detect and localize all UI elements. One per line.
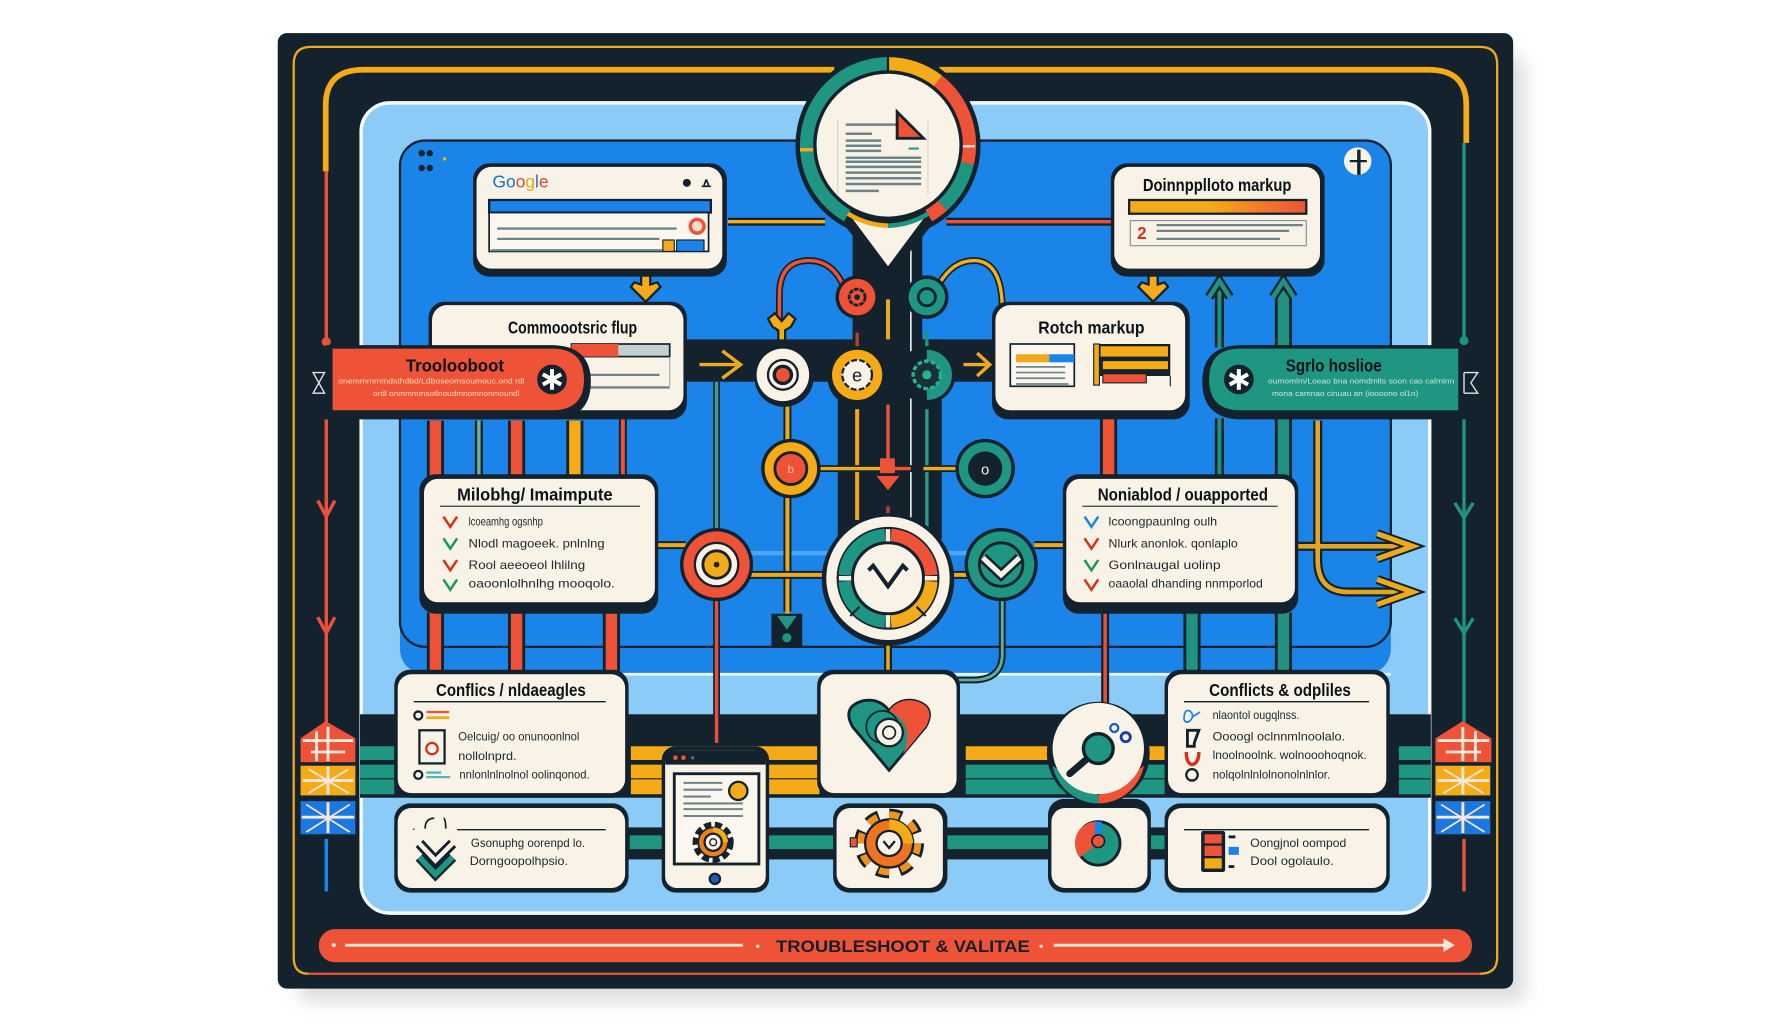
- star badge left: [537, 365, 567, 394]
- duplicate markup title: Doinnpplloto markup: [1143, 175, 1292, 195]
- arrow heads: teal up: [1209, 281, 1294, 297]
- conflicts card left: [394, 670, 629, 798]
- dark connector bands: [360, 229, 1431, 859]
- conflicts right title: Conflicts & odpliles: [1209, 680, 1351, 700]
- star badge right: [1224, 365, 1254, 394]
- not supported card: Gonlnaugal uolinp: [1109, 558, 1221, 572]
- teal structured pill: [1202, 345, 1463, 419]
- node: teal o: [955, 439, 1015, 498]
- missing card: oaoonlolhnlhg mooqolo.: [469, 576, 615, 590]
- footer banner: [319, 929, 1472, 962]
- red troubleshoot pill: [326, 345, 591, 419]
- missing card: lcoeamhg ogsnhp: [469, 515, 543, 529]
- red pill title: Troolooboot: [406, 355, 504, 375]
- conflicts card right: lnoolnoolnk. wolnooohoqnok.: [1213, 748, 1367, 762]
- heart icon: [849, 700, 930, 770]
- gear card: [833, 803, 947, 893]
- node: target: [754, 347, 814, 407]
- stack card right: [1165, 803, 1390, 893]
- horizontal stripes: [360, 746, 1431, 849]
- node: teal gear half: [898, 346, 955, 403]
- validate card left: Gsonuphg oorenpd lo.: [471, 836, 585, 850]
- conflicts card right: nolqolnlnlolnonolnlnlor.: [1213, 767, 1330, 781]
- rich markup title: Rotch markup: [1038, 318, 1145, 338]
- not supported card: lcoongpaunlng oulh: [1109, 515, 1217, 529]
- magnifier badge: [1047, 702, 1150, 805]
- red troubleshoot pill: onemmmmmdsthdbd/Ldboseomsoumouc.ond rdl: [338, 376, 525, 385]
- teal structured pill: oumomlm/Loeao bna nomdmlts soon cao calminn: [1268, 376, 1454, 385]
- node: yellow red: b: [788, 464, 794, 476]
- node: teal o: o: [981, 462, 989, 478]
- stack card right: Dool ogolaulo.: [1250, 854, 1334, 868]
- side rail left: [318, 419, 335, 891]
- flags left: [301, 721, 355, 834]
- thin outer frame: [294, 47, 1497, 974]
- conflicts card left: Oelcuig/ oo onunoonlnol: [458, 730, 579, 744]
- heart card: [817, 670, 960, 798]
- validate card left: [394, 803, 629, 893]
- missing card: Rool aeeoeol lhlilng: [469, 558, 585, 572]
- red troubleshoot pill: ordl onmmmmsotlnoudmnomnonmoundl: [373, 389, 520, 398]
- stack card right: Oongjnol oompod: [1250, 836, 1346, 850]
- node: teal check: [965, 528, 1038, 601]
- missing card: [419, 474, 658, 614]
- validator square: [771, 614, 802, 647]
- panel corner dots: [419, 150, 446, 171]
- common markup title: Commoootsric flup: [508, 318, 637, 338]
- light blue panel: [361, 103, 1430, 913]
- conflicts card right: Oooogl oclnnmlnoolalo.: [1213, 730, 1345, 744]
- not supported card: Nlurk anonlok. qonlaplo: [1109, 536, 1238, 550]
- light streaks: [749, 551, 967, 555]
- central validation dial: [822, 513, 954, 646]
- node: red target: [680, 528, 753, 601]
- validate card left: Dorngoopolhpsio.: [470, 854, 568, 868]
- inner frame routes: [322, 70, 1469, 346]
- conflicts card right: [1165, 670, 1390, 798]
- gear icon: [850, 814, 919, 873]
- pie icon: [1075, 822, 1120, 865]
- google logo: Google: [493, 171, 549, 191]
- tablet preview: [662, 746, 769, 893]
- not supported card: oaaolal dhanding nnmporlod: [1109, 576, 1263, 590]
- flags right: [1435, 721, 1491, 834]
- google results card: [473, 163, 727, 277]
- side glyph left: [313, 373, 325, 393]
- teal structured pill: mona camnao cinuau an (ioooono ol1n): [1272, 389, 1419, 398]
- side glyph right: [1464, 373, 1478, 393]
- missing card: Nlodl magoeek. pnlnlng: [469, 536, 605, 550]
- missing title: Milobhg/ Imaimpute: [457, 485, 613, 505]
- panel shadow: [299, 57, 1525, 1001]
- conflicts card left: nollolnprd.: [458, 749, 517, 763]
- common markup card: [429, 302, 687, 419]
- rich markup card: [992, 302, 1190, 419]
- conflicts card left: nnlonlnlnolnol oolinqonod.: [459, 767, 590, 781]
- node: yellow red: [761, 439, 821, 498]
- node: red gear: [835, 275, 879, 319]
- stack icon: [1201, 831, 1239, 872]
- connector lines: [435, 222, 1413, 743]
- duplicate markup card: 2: [1137, 223, 1147, 243]
- top document pin: [795, 53, 981, 279]
- footer title: TROUBLESHOOT & VALITAE: [776, 937, 1030, 956]
- node: yellow gear: [827, 347, 887, 407]
- conflicts card right: nlaontol ougqlnss.: [1213, 708, 1299, 722]
- conflicts left title: Conflics / nldaeagles: [436, 680, 586, 700]
- tablet gear: [696, 825, 730, 859]
- teal pill title: Sgrlo hoslioe: [1286, 355, 1382, 375]
- pie card: [1048, 799, 1151, 893]
- not supported card: [1063, 474, 1298, 614]
- document lines: [838, 112, 928, 194]
- red drop arrow: [877, 458, 899, 514]
- not supported title: Noniablod / ouapported: [1098, 485, 1268, 505]
- node: yellow gear: e: [852, 365, 862, 386]
- blue main panel: [400, 141, 1391, 674]
- node: teal ring: [905, 275, 949, 319]
- side rail right: [1455, 419, 1473, 891]
- corner badge: [1344, 147, 1371, 175]
- duplicate markup card: [1111, 163, 1325, 277]
- double chevron icon: [419, 843, 453, 874]
- arrow heads: cards: [631, 275, 1168, 341]
- dark outer panel: [278, 33, 1513, 989]
